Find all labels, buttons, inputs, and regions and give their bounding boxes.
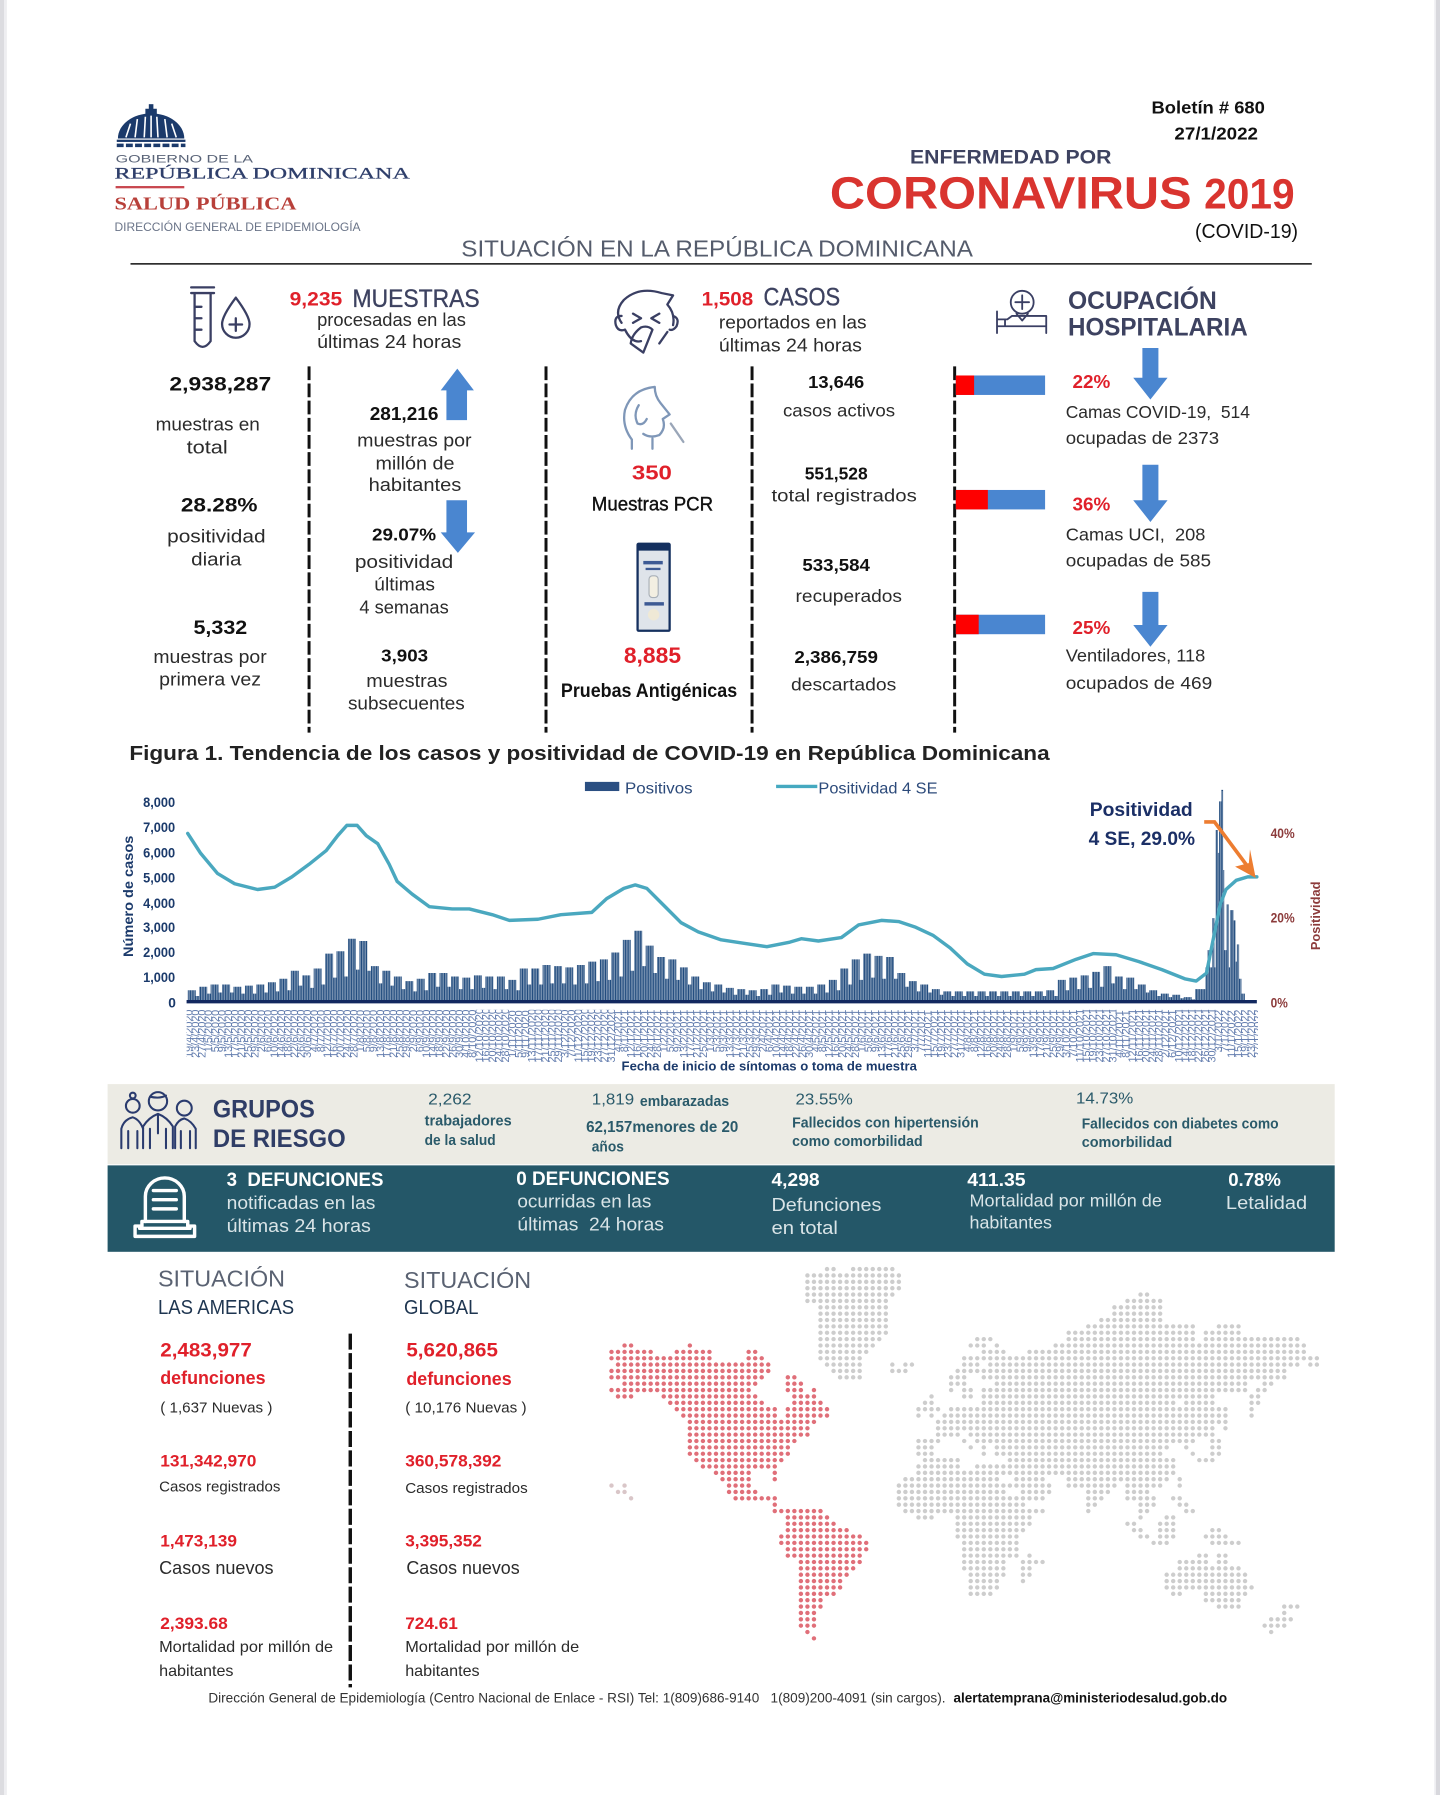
heading: grupos de riesgo: GRUPOS	[213, 1095, 315, 1123]
chart: tendencia de casos y positividad	[121, 780, 1323, 1073]
heading: casos: 1,508	[702, 289, 753, 311]
stat: defunciones américas: defunciones	[160, 1367, 266, 1388]
title: 2019	[1204, 170, 1295, 217]
text: camas uci	[1066, 524, 1211, 571]
stat: muestras subsecuentes: subsecuentes	[348, 693, 465, 714]
heading: ocupación hospitalaria	[1068, 285, 1248, 341]
icon: swab in nose	[624, 387, 683, 449]
stat: casos activos: 13,646	[808, 372, 864, 392]
y axis labels: 1,000	[143, 970, 175, 985]
stat: positividad diaria: diaria	[191, 549, 242, 570]
heading: las américas: SITUACIÓN	[158, 1266, 285, 1292]
line: positividad	[188, 825, 1257, 981]
stat: mortalidad américas: Mortalidad por millón de	[159, 1639, 333, 1656]
arrow: down covid beds	[1133, 348, 1168, 400]
x axis baseline	[187, 1000, 1257, 1003]
stat: 0 defunciones: ocurridas en las	[517, 1191, 651, 1212]
stacked bar: ventiladores	[956, 615, 1045, 634]
stat: positividad diaria	[167, 495, 266, 570]
bulletin number and date: Boletín # 680	[1152, 97, 1265, 117]
heading: grupos de riesgo: DE RIESGO	[213, 1125, 346, 1153]
stacked bar: camas uci	[956, 490, 1045, 509]
stat: trabajadores de la salud: de la salud	[425, 1133, 496, 1149]
stacked bar: camas covid	[956, 375, 1045, 395]
percent: 22: 22%	[1073, 371, 1110, 392]
stat: muestras por millón: millón de	[375, 452, 454, 473]
stat: mortalidad: Mortalidad por millón de	[970, 1191, 1162, 1211]
stat: muestras en total: total	[187, 436, 228, 457]
right axis labels: 20%	[1271, 911, 1295, 926]
stat: embarazadas y menores: años	[592, 1140, 624, 1156]
stat: descartados	[791, 647, 896, 694]
stat: embarazadas y menores: 1,819	[592, 1091, 634, 1109]
stat: muestras pcr: Muestras PCR	[592, 494, 713, 516]
text: camas uci: Camas UCI, 208	[1066, 524, 1205, 544]
right axis labels	[1271, 826, 1295, 1010]
legend: Positividad 4 SE	[818, 780, 937, 797]
stat: pruebas antigénicas: 8,885	[624, 643, 681, 668]
legend: Positivos	[625, 780, 693, 797]
stat: muestras por primera vez: primera vez	[159, 669, 261, 690]
stat: hipertensión	[792, 1091, 979, 1150]
stat: trabajadores de la salud: 2,262	[428, 1091, 472, 1109]
stat: casos nuevos global	[405, 1532, 520, 1578]
heading: muestras: procesadas en las	[317, 309, 466, 330]
stat: letalidad	[1226, 1169, 1307, 1213]
stat: defunciones global: defunciones	[406, 1368, 512, 1389]
y axis labels: 3,000	[143, 920, 175, 935]
stat: defunciones global: 5,620,865	[406, 1340, 498, 1362]
stat: mortalidad global: habitantes	[405, 1663, 480, 1680]
y axis title: Número de casos	[121, 835, 136, 957]
text: camas covid: Camas COVID-19, 514	[1066, 402, 1250, 422]
stat: casos registrados global: Casos registrados	[405, 1481, 528, 1497]
stat: muestras en total: muestras en	[156, 413, 260, 434]
callout: positividad 4 se	[1089, 799, 1195, 850]
stat: hipertensión: Fallecidos con hipertensión	[792, 1116, 979, 1132]
title: (COVID-19)	[1195, 220, 1298, 243]
stat: casos registrados américas: 131,342,970	[160, 1451, 256, 1470]
stat: muestras por millón	[357, 403, 472, 495]
logo: gobierno de la república dominicana	[114, 104, 410, 234]
world map: dotted	[611, 1269, 1317, 1638]
stat: mortalidad: habitantes	[970, 1212, 1052, 1232]
stat: recuperados: recuperados	[796, 586, 902, 606]
icon: hospital bed	[997, 291, 1046, 333]
stat: muestras por primera vez: muestras por	[153, 646, 267, 667]
stat: diabetes: 14.73%	[1076, 1090, 1133, 1108]
text: ventiladores	[1066, 646, 1212, 693]
stat: mortalidad	[967, 1169, 1162, 1232]
stat: 0 defunciones: 0 DEFUNCIONES	[516, 1168, 670, 1190]
right axis labels: 40%	[1271, 826, 1295, 841]
panel: ocupación hospitalaria	[956, 285, 1250, 693]
stat: muestras por millón: 281,216	[370, 403, 438, 424]
stat: trabajadores de la salud: trabajadores	[425, 1113, 512, 1129]
text: ventiladores: ocupados de 469	[1066, 673, 1212, 693]
icon: test tube and drop	[191, 287, 250, 347]
subtitle: situación en la república dominicana: SITUACIÓN EN LA REPÚBLICA DOMINICANA	[461, 235, 974, 261]
heading: muestras	[290, 285, 480, 352]
stat: embarazadas y menores	[586, 1091, 738, 1156]
stat: 3 defunciones: 3 DEFUNCIONES	[227, 1169, 383, 1191]
heading: global: SITUACIÓN	[404, 1267, 531, 1293]
stat: letalidad: 0.78%	[1228, 1169, 1281, 1190]
y axis labels: 4,000	[143, 896, 175, 911]
stat: positividad diaria: positividad	[167, 526, 266, 547]
arrow: down uci beds	[1133, 465, 1168, 522]
stat: diabetes: Fallecidos con diabetes como	[1082, 1117, 1279, 1133]
stat: mortalidad américas: habitantes	[159, 1663, 234, 1680]
legend	[585, 780, 937, 797]
stat: positividad 4 semanas: 4 semanas	[359, 597, 449, 618]
panel: casos	[561, 284, 917, 702]
footer: Dirección General de Epidemiología (Centro Nacional de Enlace - RSI) Tel: 1(809)686-9140 1(809)200-4091 (sin cargos).	[208, 1690, 946, 1705]
map: the americas	[611, 1345, 866, 1638]
arrow: down	[441, 500, 475, 553]
map: rest of the world	[807, 1269, 1317, 1632]
heading: muestras: 9,235	[290, 289, 342, 311]
stat: defunciones en total	[772, 1169, 881, 1238]
stat: mortalidad global	[405, 1614, 579, 1680]
y axis labels: 8,000	[143, 795, 175, 810]
text: camas uci: ocupadas de 585	[1066, 551, 1211, 571]
stat: descartados: descartados	[791, 674, 896, 694]
stat: mortalidad global: 724.61	[405, 1614, 458, 1633]
stat: 3 defunciones: últimas 24 horas	[227, 1215, 371, 1236]
bulletin number and date	[1152, 97, 1265, 144]
text: gobierno: GOBIERNO DE LA	[116, 154, 253, 166]
stat: 3 defunciones	[227, 1169, 383, 1236]
stat: muestras pcr	[592, 462, 713, 516]
text: camas covid: ocupadas de 2373	[1066, 428, 1219, 448]
percent: 36: 36%	[1073, 494, 1110, 515]
stat: positividad 4 semanas: últimas	[374, 574, 435, 595]
text: dirección general: DIRECCIÓN GENERAL DE EPIDEMIOLOGÍA	[114, 219, 361, 234]
y axis labels: 2,000	[143, 945, 175, 960]
stat: 0 defunciones: últimas 24 horas	[517, 1214, 664, 1235]
stat: muestras por millón: muestras por	[357, 429, 472, 450]
stat: diabetes: comorbilidad	[1082, 1135, 1172, 1151]
percent: 25: 25%	[1073, 617, 1110, 638]
stat: casos nuevos américas: Casos nuevos	[159, 1557, 274, 1578]
stat: mortalidad américas	[159, 1614, 333, 1680]
stat: casos registrados global	[405, 1451, 528, 1497]
stat: muestras por primera vez	[153, 617, 267, 690]
stat: defunciones américas: 2,483,977	[160, 1340, 252, 1362]
icon: antigen test device	[636, 543, 671, 632]
heading: ocupación hospitalaria: OCUPACIÓN	[1068, 285, 1217, 315]
stat: muestras en total	[156, 373, 271, 457]
right axis labels: 0%	[1271, 995, 1288, 1010]
stat: trabajadores de la salud	[425, 1091, 512, 1149]
arrow: orange callout	[1204, 822, 1256, 878]
stat: defunciones global: ( 10,176 Nuevas )	[405, 1401, 527, 1417]
y axis labels	[143, 795, 176, 1010]
heading: muestras: MUESTRAS	[353, 285, 480, 313]
bars: positivos	[188, 790, 1245, 1002]
stat: muestras subsecuentes	[348, 646, 465, 714]
stat: defunciones en total: en total	[772, 1217, 838, 1238]
stat: total registrados	[772, 464, 917, 505]
stat: 0 defunciones	[516, 1168, 670, 1235]
stat: casos registrados américas: Casos registrados	[159, 1480, 280, 1496]
heading: casos: CASOS	[763, 284, 840, 312]
stat: positividad 4 semanas: positividad	[355, 551, 453, 572]
stat: 3 defunciones: notificadas en las	[227, 1192, 375, 1213]
stat: muestras por millón: habitantes	[369, 474, 461, 495]
stat: pruebas antigénicas	[561, 643, 737, 702]
stat: embarazadas y menores: embarazadas	[640, 1094, 729, 1110]
stat: muestras por primera vez: 5,332	[193, 617, 247, 639]
stat: casos nuevos américas	[159, 1532, 274, 1578]
stat: defunciones en total: Defunciones	[772, 1194, 881, 1215]
icon: people	[121, 1092, 196, 1148]
heading: figura 1: Figura 1. Tendencia de los casos y positividad de COVID-19 en República Dominicana	[129, 742, 1050, 765]
y axis labels: 0	[168, 995, 176, 1010]
map: hawaii	[611, 1486, 631, 1498]
x axis title: Fecha de inicio de síntomas o toma de muestra	[622, 1058, 918, 1073]
footer: alertatemprana@ministeriodesalud.gob.do	[954, 1690, 1227, 1705]
right axis title: Positividad	[1309, 881, 1323, 950]
y axis labels: 5,000	[143, 871, 175, 886]
stat: muestras en total: 2,938,287	[169, 373, 271, 395]
stat: total registrados: total registrados	[772, 485, 917, 505]
arrow: up	[441, 369, 474, 420]
heading: casos	[702, 284, 867, 355]
stat: letalidad: Letalidad	[1226, 1192, 1307, 1213]
title	[830, 147, 1298, 243]
heading: casos: reportados en las	[719, 312, 867, 333]
heading: casos: últimas 24 horas	[719, 334, 862, 355]
stat: casos registrados global: 360,578,392	[405, 1451, 501, 1470]
heading: las américas: LAS AMERICAS	[158, 1296, 294, 1319]
stat: casos nuevos global: Casos nuevos	[406, 1557, 520, 1578]
text: ventiladores: Ventiladores, 118	[1066, 646, 1205, 666]
stat: recuperados: 533,584	[802, 555, 870, 575]
stat: mortalidad: 411.35	[967, 1169, 1026, 1190]
callout: positividad 4 se: 4 SE, 29.0%	[1089, 828, 1195, 850]
panel: grupos de riesgo	[108, 1084, 1335, 1164]
callout: positividad 4 se: Positividad	[1090, 799, 1193, 821]
title: CORONAVIRUS	[830, 167, 1192, 218]
stat: pruebas antigénicas: Pruebas Antigénicas	[561, 680, 737, 702]
icon: capitol dome	[117, 104, 185, 145]
text: salud pública: SALUD PÚBLICA	[114, 193, 297, 213]
y axis labels: 7,000	[143, 820, 175, 835]
panel: situación las américas	[158, 1266, 333, 1680]
heading: global	[404, 1267, 531, 1319]
stat: diabetes	[1076, 1090, 1279, 1151]
stat: defunciones américas: ( 1,637 Nuevas )	[160, 1401, 272, 1417]
stat: positividad diaria: 28.28%	[181, 495, 258, 517]
stat: mortalidad américas: 2,393.68	[160, 1614, 228, 1633]
stat: hipertensión: como comorbilidad	[792, 1134, 923, 1150]
stat: mortalidad global: Mortalidad por millón de	[405, 1639, 579, 1656]
arrow: down ventilators	[1133, 592, 1168, 647]
stat: hipertensión: 23.55%	[796, 1091, 853, 1109]
icon: face with mask	[615, 291, 678, 353]
heading: grupos de riesgo	[213, 1095, 346, 1153]
text: república dominicana: REPÚBLICA DOMINICANA	[114, 164, 410, 183]
title: ENFERMEDAD POR	[910, 147, 1111, 169]
stat: positividad 4 semanas	[355, 524, 453, 618]
stat: casos activos: casos activos	[783, 401, 895, 421]
stat: positividad 4 semanas: 29.07%	[372, 524, 436, 544]
stat: embarazadas y menores: 62,157menores de 20	[586, 1118, 738, 1136]
heading: las américas	[158, 1266, 294, 1319]
stat: muestras subsecuentes: 3,903	[381, 646, 428, 666]
heading: global: GLOBAL	[404, 1296, 478, 1319]
stat: defunciones américas	[160, 1340, 272, 1417]
bulletin number and date: 27/1/2022	[1174, 124, 1258, 144]
stat: casos nuevos global: 3,395,352	[405, 1532, 482, 1551]
text: camas covid	[1066, 402, 1250, 448]
stat: total registrados: 551,528	[805, 464, 868, 484]
stat: descartados: 2,386,759	[794, 647, 878, 667]
stat: defunciones global	[405, 1340, 527, 1417]
stat: muestras subsecuentes: muestras	[366, 670, 448, 691]
stat: casos registrados américas	[159, 1451, 280, 1496]
heading: muestras: últimas 24 horas	[317, 331, 461, 352]
stat: casos nuevos américas: 1,473,139	[160, 1532, 237, 1551]
panel: situación global	[404, 1267, 579, 1680]
heading: ocupación hospitalaria: HOSPITALARIA	[1068, 313, 1248, 341]
stat: defunciones en total: 4,298	[772, 1169, 820, 1190]
stat: muestras pcr: 350	[632, 462, 672, 485]
y axis labels: 6,000	[143, 845, 175, 860]
panel: defunciones	[108, 1165, 1335, 1252]
bar texture	[188, 804, 1255, 988]
panel: muestras	[153, 285, 480, 714]
stat: recuperados	[796, 555, 902, 606]
icon: tombstone	[135, 1178, 195, 1236]
stat: casos activos	[783, 372, 895, 421]
